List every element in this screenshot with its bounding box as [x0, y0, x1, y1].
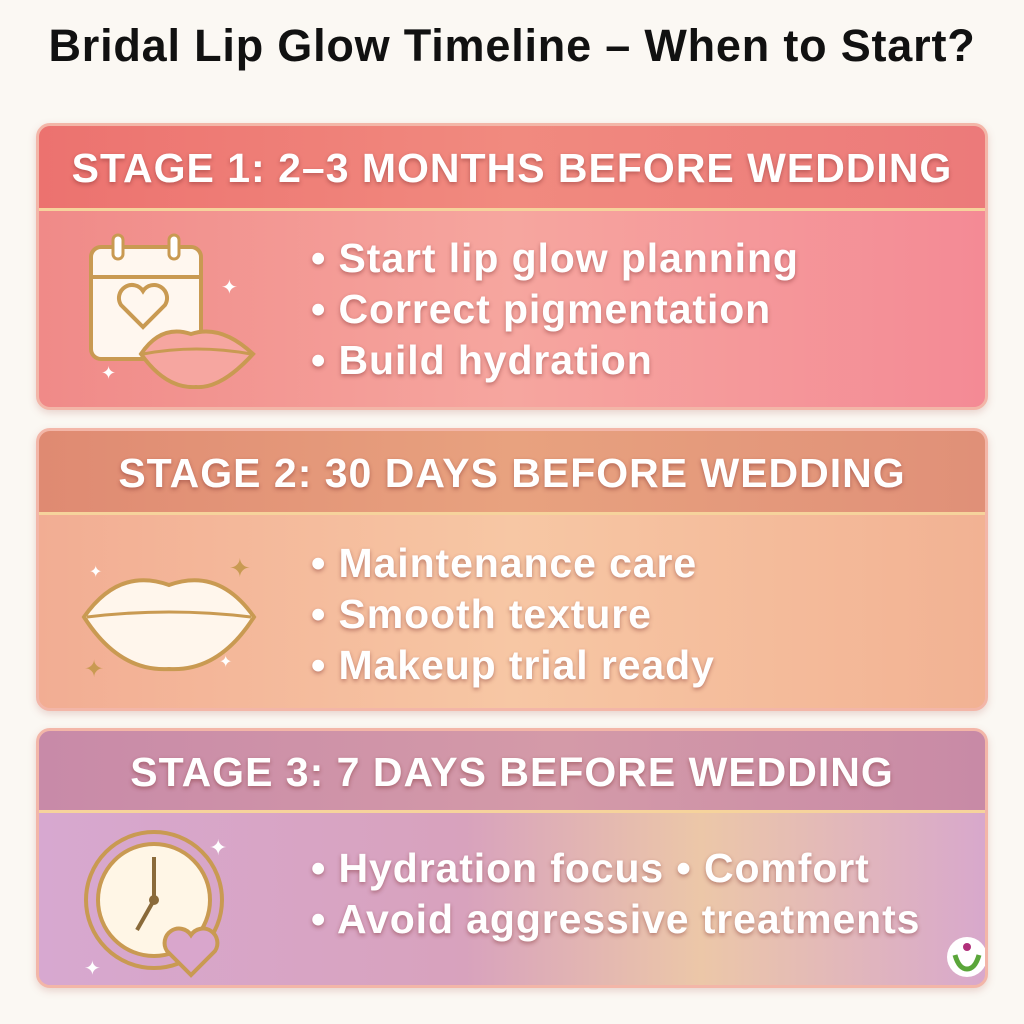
- icon: calendar with lips: [89, 234, 256, 389]
- stage 3 header: STAGE 3: 7 DAYS BEFORE WEDDING: [130, 749, 894, 795]
- stage 1 bullets: • Correct pigmentation: [311, 286, 771, 332]
- icon: clock with heart: ✦: [209, 835, 227, 860]
- icon: lips with sparkles: ✦: [219, 654, 232, 671]
- stage 2 body: [39, 515, 985, 708]
- icon: lips with sparkles: ✦: [229, 553, 251, 583]
- stage 2 bullets: • Maintenance care: [311, 540, 697, 586]
- stage 1 body: [39, 211, 985, 407]
- stage 3 body: [39, 813, 985, 985]
- icon: calendar with lips: ✦: [101, 363, 116, 383]
- icon: clock with heart: ✦: [84, 958, 101, 980]
- stage 1 bullets: • Build hydration: [311, 337, 653, 383]
- stage 2 bullets: [310, 540, 715, 692]
- logo badge: [947, 937, 985, 977]
- title: Bridal Lip Glow Timeline – When to Start?: [48, 20, 976, 71]
- icon: lips with sparkles: ✦: [84, 656, 104, 683]
- stage 2 header: STAGE 2: 30 DAYS BEFORE WEDDING: [118, 450, 906, 496]
- icon: lips with sparkles: [82, 553, 256, 683]
- stage 1 header: [39, 126, 985, 211]
- stage 3 bullets: • Avoid aggressive treatments: [311, 896, 920, 942]
- icon: clock with heart: [84, 830, 227, 980]
- panel: stage 3: [36, 728, 988, 988]
- stage 2 bullets: • Smooth texture: [311, 591, 652, 637]
- stage 3 bullets: • Hydration focus • Comfort: [311, 845, 870, 891]
- stage 3 bullets: [310, 845, 920, 946]
- stage 3 header: [39, 731, 985, 813]
- stage 1 bullets: • Start lip glow planning: [311, 235, 799, 281]
- panel: stage 2: [36, 428, 988, 711]
- stage 2 header: [39, 431, 985, 515]
- panel: stage 1: [36, 123, 988, 410]
- icon: calendar with lips: ✦: [221, 277, 238, 299]
- icon: lips with sparkles: ✦: [89, 564, 102, 581]
- stage 2 bullets: • Makeup trial ready: [311, 642, 715, 688]
- stage 1 bullets: [310, 235, 799, 386]
- stage 1 header: STAGE 1: 2–3 MONTHS BEFORE WEDDING: [72, 145, 952, 191]
